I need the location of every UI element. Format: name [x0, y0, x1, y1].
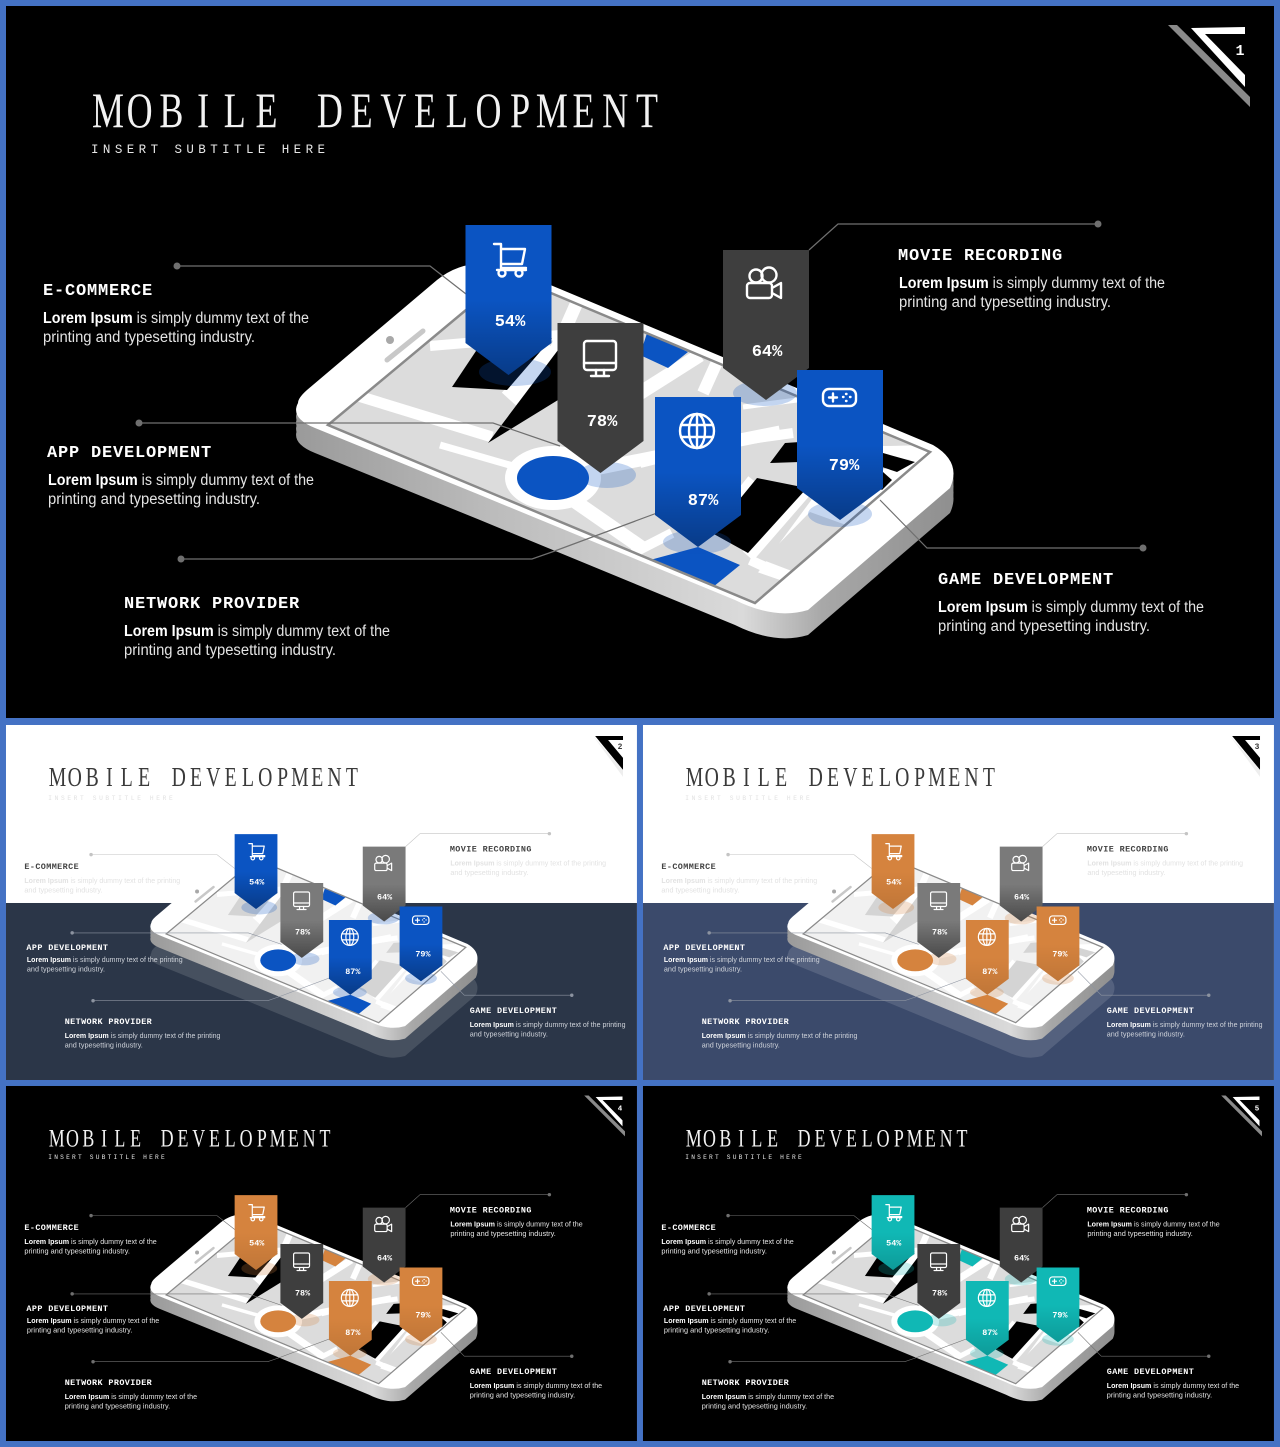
callout: game development: GAME DEVELOPMENT: [1107, 1006, 1194, 1016]
leader lines: [707, 832, 1210, 1002]
callout: app development: APP DEVELOPMENT: [26, 1304, 108, 1314]
pin percentages: 78%: [295, 1288, 311, 1298]
pin percentages: [886, 878, 1069, 977]
callout: app development: [47, 444, 314, 508]
pin percentages: 54%: [495, 313, 526, 332]
corner logo with page number: [593, 736, 623, 777]
leader lines: [136, 220, 1146, 562]
callout: network provider: Lorem Ipsum is simply dummy text of the printing: [702, 1031, 857, 1040]
pin percentages: 64%: [377, 1253, 393, 1264]
pins with icons: [235, 834, 442, 995]
callout: network provider: Lorem Ipsum is simply dummy text of the: [702, 1392, 834, 1401]
callout: app development: APP DEVELOPMENT: [663, 1304, 745, 1314]
pin percentages: 54%: [249, 1239, 265, 1249]
callout: app development: [663, 943, 820, 973]
callout: e-commerce: Lorem Ipsum is simply dummy text of the printing: [661, 876, 817, 885]
callout: game development: GAME DEVELOPMENT: [1107, 1367, 1194, 1377]
callout: game development: [470, 1006, 625, 1039]
callout: app development: Lorem Ipsum is simply dummy text of the printing: [664, 955, 820, 964]
callout: app development: [663, 1304, 796, 1334]
callout: e-commerce: E-COMMERCE: [24, 1223, 79, 1233]
callout: app development: APP DEVELOPMENT: [663, 943, 745, 953]
callout: app development: printing and typesetting industry.: [48, 491, 260, 508]
pins with icons: [872, 1195, 1079, 1356]
callout: e-commerce: printing and typesetting industry.: [661, 1247, 767, 1256]
title: MOBILE DEVELOPMENT: [686, 1125, 967, 1152]
callout: movie recording: and typesetting industry.: [450, 868, 528, 877]
pin percentages: 64%: [1014, 1253, 1030, 1264]
leader lines: [70, 832, 573, 1002]
corner logo with page number: 1: [1235, 43, 1245, 60]
callout: game development: printing and typesetting industry.: [938, 618, 1150, 635]
callout: network provider: NETWORK PROVIDER: [702, 1017, 790, 1027]
callout: app development: [26, 943, 183, 973]
callout: e-commerce: Lorem Ipsum is simply dummy text of the: [43, 310, 309, 327]
corner logo with page number: 4: [618, 1105, 623, 1113]
pin percentages: 79%: [415, 949, 432, 959]
subtitle: INSERT SUBTITLE HERE: [91, 143, 325, 157]
callout: network provider: and typesetting industry.: [65, 1041, 143, 1050]
corner logo with page number: [1168, 25, 1250, 107]
pin percentages: 79%: [1052, 1310, 1069, 1320]
subtitle: INSERT SUBTITLE HERE: [685, 795, 810, 802]
callout: game development: Lorem Ipsum is simply dummy text of the: [938, 599, 1204, 616]
callout: network provider: and typesetting industry.: [702, 1041, 780, 1050]
callout: movie recording: Lorem Ipsum is simply dummy text of the printing: [1087, 859, 1243, 868]
callout: game development: [1107, 1006, 1262, 1039]
callout: movie recording: [1087, 1206, 1220, 1238]
corner logo with page number: 2: [618, 743, 623, 752]
callout: network provider: NETWORK PROVIDER: [124, 595, 300, 614]
callout: movie recording: MOVIE RECORDING: [450, 845, 532, 855]
callout: network provider: Lorem Ipsum is simply dummy text of the: [124, 623, 390, 640]
callout: movie recording: Lorem Ipsum is simply dummy text of the printing: [450, 859, 606, 868]
phone reflection: [787, 883, 1114, 1058]
corner logo with page number: [1221, 1095, 1262, 1136]
phone with map: [150, 1214, 477, 1401]
pin percentages: 64%: [752, 343, 783, 362]
leader lines: [70, 1193, 573, 1363]
callout: e-commerce: Lorem Ipsum is simply dummy text of the: [24, 1237, 157, 1246]
callout: movie recording: MOVIE RECORDING: [450, 1206, 532, 1216]
title: MOBILE DEVELOPMENT: [92, 83, 658, 138]
callout: game development: [470, 1367, 602, 1400]
callout: e-commerce: Lorem Ipsum is simply dummy text of the: [661, 1237, 794, 1246]
callout: movie recording: Lorem Ipsum is simply dummy text of the: [899, 275, 1165, 292]
callout: game development: and typesetting industry.: [1107, 1030, 1185, 1039]
callout: network provider: [702, 1017, 857, 1050]
pin percentages: 64%: [377, 892, 393, 903]
callout: game development: GAME DEVELOPMENT: [470, 1367, 557, 1377]
pin percentages: 79%: [1052, 949, 1069, 959]
callout: e-commerce: E-COMMERCE: [24, 862, 79, 872]
callout: game development: [1107, 1367, 1239, 1400]
pin percentages: [886, 1239, 1069, 1338]
subtitle: INSERT SUBTITLE HERE: [48, 795, 173, 802]
callout: e-commerce: and typesetting industry.: [661, 886, 740, 895]
callout: game development: GAME DEVELOPMENT: [938, 571, 1114, 590]
callout: game development: Lorem Ipsum is simply dummy text of the: [1107, 1381, 1239, 1390]
pin percentages: 54%: [886, 1239, 902, 1249]
callout: app development: Lorem Ipsum is simply dummy text of the: [48, 472, 314, 489]
callout: game development: Lorem Ipsum is simply dummy text of the printing: [470, 1020, 625, 1029]
slide 1: main black slide: [6, 6, 1274, 718]
pin percentages: 87%: [345, 967, 361, 977]
pin percentages: 54%: [249, 878, 265, 888]
callout: movie recording: [1087, 845, 1243, 877]
callout: game development: [938, 571, 1204, 635]
pin percentages: 78%: [295, 927, 311, 937]
pin percentages: 87%: [982, 967, 998, 977]
phone with map: [787, 853, 1114, 1040]
callout: e-commerce: [24, 1223, 157, 1256]
phone with map: [296, 263, 954, 638]
callout: movie recording: printing and typesetting industry.: [1087, 1229, 1193, 1238]
callout: e-commerce: [661, 862, 817, 895]
callout: app development: and typesetting industry.: [27, 964, 105, 973]
callout: app development: APP DEVELOPMENT: [26, 943, 108, 953]
corner logo with page number: 3: [1255, 743, 1260, 752]
pin percentages: 78%: [932, 927, 948, 937]
callout: e-commerce: printing and typesetting industry.: [43, 329, 255, 346]
callout: game development: printing and typesetting industry.: [470, 1391, 575, 1400]
callout: network provider: Lorem Ipsum is simply dummy text of the: [65, 1392, 197, 1401]
callout: movie recording: printing and typesetting industry.: [899, 294, 1111, 311]
pin percentages: 78%: [587, 413, 618, 432]
phone reflection: [150, 883, 477, 1058]
callout: network provider: printing and typesetting industry.: [702, 1402, 807, 1411]
pin percentages: [249, 1239, 432, 1338]
pins with icons: [872, 834, 1079, 995]
callout: network provider: NETWORK PROVIDER: [702, 1378, 790, 1388]
pin percentages: 78%: [932, 1288, 948, 1298]
callout: game development: and typesetting industry.: [470, 1030, 548, 1039]
callout: e-commerce: E-COMMERCE: [661, 1223, 716, 1233]
pin percentages: 87%: [345, 1328, 361, 1338]
callout: game development: GAME DEVELOPMENT: [470, 1006, 557, 1016]
title: MOBILE DEVELOPMENT: [49, 1125, 330, 1152]
callout: network provider: NETWORK PROVIDER: [65, 1378, 153, 1388]
callout: movie recording: [450, 1206, 583, 1238]
callout: movie recording: MOVIE RECORDING: [898, 247, 1063, 266]
leader lines: [707, 1193, 1210, 1363]
callout: e-commerce: [43, 282, 309, 346]
title: MOBILE DEVELOPMENT: [49, 763, 358, 793]
slide 2: white and navy, blue accent: [6, 725, 637, 1080]
callout: e-commerce: Lorem Ipsum is simply dummy text of the printing: [24, 876, 180, 885]
corner logo with page number: [1230, 736, 1260, 777]
pin percentages: 87%: [688, 492, 719, 511]
callout: network provider: NETWORK PROVIDER: [65, 1017, 153, 1027]
callout: network provider: printing and typesetting industry.: [65, 1402, 170, 1411]
pin percentages: [495, 313, 860, 511]
callout: game development: Lorem Ipsum is simply dummy text of the printing: [1107, 1020, 1262, 1029]
callout: movie recording: MOVIE RECORDING: [1087, 1206, 1169, 1216]
callout: e-commerce: printing and typesetting industry.: [24, 1247, 130, 1256]
callout: app development: printing and typesetting industry.: [664, 1325, 769, 1334]
callout: e-commerce: E-COMMERCE: [661, 862, 716, 872]
corner logo with page number: 5: [1255, 1105, 1260, 1113]
callout: movie recording: MOVIE RECORDING: [1087, 845, 1169, 855]
callout: game development: Lorem Ipsum is simply dummy text of the: [470, 1381, 602, 1390]
callout: app development: Lorem Ipsum is simply dummy text of the printing: [27, 955, 183, 964]
subtitle: INSERT SUBTITLE HERE: [48, 1154, 165, 1161]
callout: network provider: printing and typesetting industry.: [124, 642, 336, 659]
callout: movie recording: Lorem Ipsum is simply dummy text of the: [1087, 1220, 1220, 1229]
phone with map: [787, 1214, 1114, 1401]
callout: movie recording: printing and typesetting industry.: [450, 1229, 556, 1238]
callout: movie recording: [898, 247, 1165, 311]
callout: network provider: [124, 595, 390, 659]
callout: app development: APP DEVELOPMENT: [47, 444, 212, 463]
callout: app development: [26, 1304, 159, 1334]
callout: network provider: [65, 1017, 220, 1050]
title: MOBILE DEVELOPMENT: [686, 763, 995, 793]
slide 4: black, orange accent: [6, 1086, 637, 1441]
pin percentages: 79%: [415, 1310, 432, 1320]
subtitle: INSERT SUBTITLE HERE: [685, 1154, 802, 1161]
callout: e-commerce: [661, 1223, 794, 1256]
slide 3: white and navy, orange accent: [643, 725, 1274, 1080]
callout: e-commerce: E-COMMERCE: [43, 282, 153, 301]
callout: app development: and typesetting industry.: [664, 964, 742, 973]
callout: app development: Lorem Ipsum is simply dummy text of the: [664, 1316, 796, 1325]
pin percentages: 87%: [982, 1328, 998, 1338]
callout: network provider: [65, 1378, 197, 1411]
slide 5: black, teal accent: [643, 1086, 1274, 1441]
phone with map: [150, 853, 477, 1040]
corner logo with page number: [584, 1095, 625, 1136]
callout: e-commerce: [24, 862, 180, 895]
callout: game development: printing and typesetting industry.: [1107, 1391, 1212, 1400]
pins with icons: [466, 225, 883, 547]
callout: e-commerce: and typesetting industry.: [24, 886, 103, 895]
pin percentages: 79%: [829, 457, 860, 476]
callout: movie recording: and typesetting industry.: [1087, 868, 1165, 877]
callout: movie recording: Lorem Ipsum is simply dummy text of the: [450, 1220, 583, 1229]
pins with icons: [235, 1195, 442, 1356]
pin percentages: 64%: [1014, 892, 1030, 903]
callout: app development: Lorem Ipsum is simply dummy text of the: [27, 1316, 159, 1325]
pin percentages: [249, 878, 432, 977]
callout: movie recording: [450, 845, 606, 877]
callout: app development: printing and typesetting industry.: [27, 1325, 132, 1334]
callout: network provider: Lorem Ipsum is simply dummy text of the printing: [65, 1031, 220, 1040]
pin percentages: 54%: [886, 878, 902, 888]
callout: network provider: [702, 1378, 834, 1411]
